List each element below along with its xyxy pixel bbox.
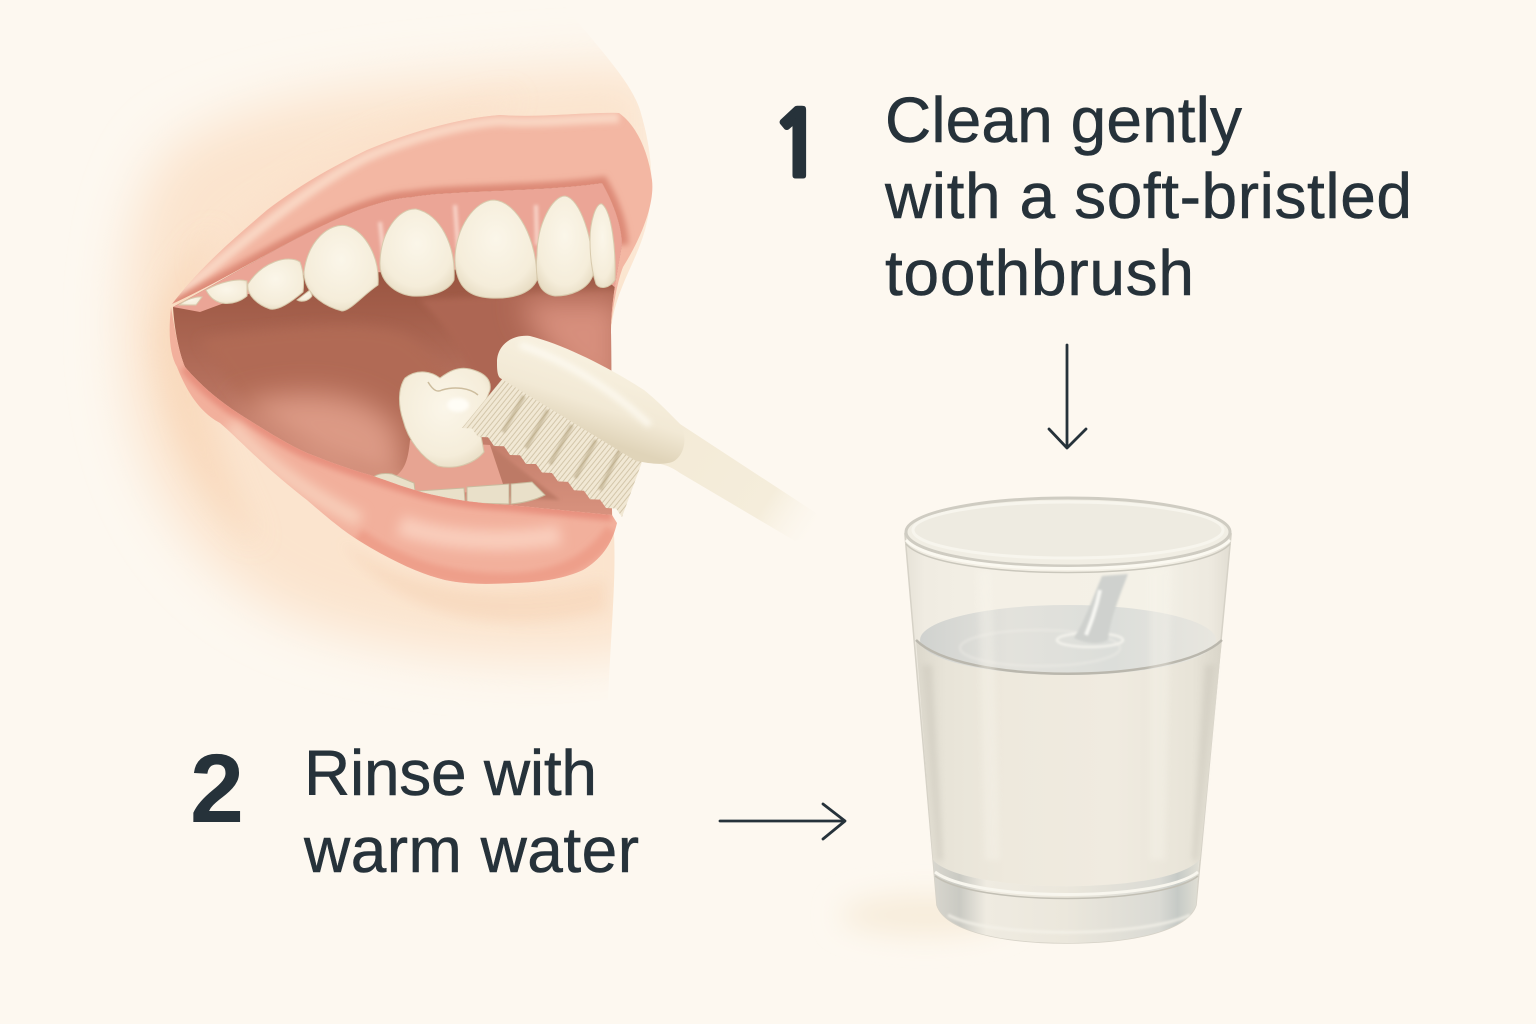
lower gum stem xyxy=(396,440,503,492)
step 1 text: Clean gently xyxy=(885,84,1242,156)
upper teeth xyxy=(179,196,615,311)
bristles xyxy=(462,379,642,517)
water stream xyxy=(1074,574,1128,643)
step 2 text: Rinse with xyxy=(304,737,597,809)
mouth interior xyxy=(173,183,622,515)
step 2 text: warm water xyxy=(303,814,639,886)
gums xyxy=(173,183,640,312)
molar tooth xyxy=(399,368,490,467)
arrow: right to glass xyxy=(720,804,845,839)
glass highlights xyxy=(978,565,1172,860)
water surface xyxy=(920,605,1216,675)
step 1 text: toothbrush xyxy=(885,237,1194,309)
water xyxy=(916,640,1222,886)
brush handle neck xyxy=(636,388,817,541)
brush head xyxy=(497,336,684,464)
lower teeth xyxy=(372,473,545,504)
upper lip xyxy=(172,112,652,322)
glass shadow xyxy=(840,895,1010,935)
illustration: mouth and toothbrush xyxy=(125,65,817,659)
back shadow beside stem xyxy=(493,450,558,500)
step 1 number: 1 xyxy=(770,101,825,190)
tongue xyxy=(244,334,410,472)
water side shading xyxy=(922,665,1215,860)
glass base xyxy=(933,860,1199,943)
lower lip xyxy=(160,300,630,590)
arrow: down to glass xyxy=(1049,345,1086,448)
water surface ripples xyxy=(960,630,1123,666)
water front line xyxy=(916,640,1222,674)
infographic canvas xyxy=(106,50,1408,944)
step 1 text: with a soft-bristled xyxy=(884,160,1412,232)
glass body xyxy=(905,535,1231,943)
face skin xyxy=(125,65,660,659)
glass of water xyxy=(840,498,1231,943)
shadow under lower lip xyxy=(372,568,604,621)
toothbrush xyxy=(462,336,796,530)
glass rim xyxy=(906,498,1230,572)
step 2 number: 2 xyxy=(190,734,244,843)
